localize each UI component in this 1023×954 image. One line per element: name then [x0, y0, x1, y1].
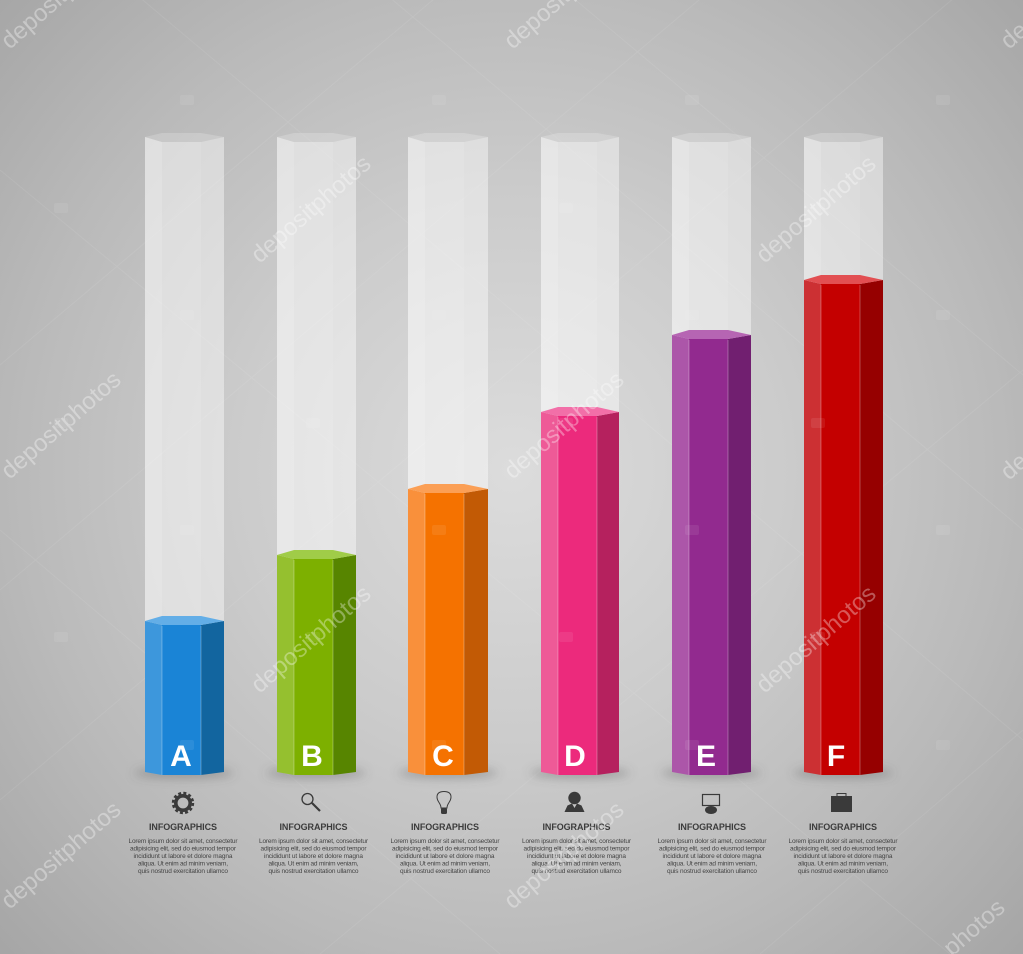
bar E	[672, 133, 751, 775]
text block E: quis nostrud exercitation ullamco	[667, 868, 757, 875]
letter A: A	[170, 740, 192, 773]
fill D	[541, 407, 619, 775]
text block F: adipisicing elit, sed do eiusmod tempor	[790, 846, 897, 852]
text block F: Lorem ipsum dolor sit amet, consectetur	[788, 838, 898, 845]
glass tube B	[277, 133, 356, 559]
icon: person	[564, 792, 584, 812]
text block A: Lorem ipsum dolor sit amet, consectetur	[128, 838, 238, 845]
shadow: bars	[134, 768, 893, 778]
text block D: adipisicing elit, sed do eiusmod tempor	[524, 846, 630, 852]
fill A	[145, 616, 224, 775]
watermarks: depositphotos	[246, 580, 376, 699]
text block C: quis nostrud exercitation ullamco	[400, 868, 490, 875]
watermarks: depositphotos	[246, 150, 376, 269]
heading D: INFOGRAPHICS	[542, 822, 610, 832]
heading E: INFOGRAPHICS	[678, 822, 746, 832]
text block F: aliqua. Ut enim ad minim veniam,	[798, 860, 888, 868]
watermarks: depositphotos	[751, 580, 881, 699]
glass tube D	[541, 133, 619, 416]
fill C	[408, 484, 488, 775]
bar C	[408, 133, 488, 775]
icon: gear	[173, 793, 193, 813]
glass tube E	[672, 133, 751, 339]
text block B: aliqua. Ut enim ad minim veniam,	[268, 860, 359, 868]
watermark camera marks	[54, 95, 950, 750]
letter C: C	[432, 740, 454, 773]
column B caption	[259, 794, 369, 875]
text block C: incididunt ut labore et dolore magna	[396, 853, 495, 860]
fill F	[804, 275, 883, 775]
text block F: incididunt ut labore et dolore magna	[794, 853, 893, 860]
glass tube F	[804, 133, 883, 284]
fill B	[277, 550, 356, 775]
text block A: quis nostrud exercitation ullamco	[138, 868, 228, 875]
column F caption	[788, 794, 898, 875]
text block E	[658, 838, 767, 875]
text block A: aliqua. Ut enim ad minim veniam,	[138, 860, 228, 868]
text block D: quis nostrud exercitation ullamco	[532, 868, 622, 875]
text block C: Lorem ipsum dolor sit amet, consectetur	[390, 838, 500, 845]
text block E: aliqua. Ut enim ad minim veniam,	[667, 860, 757, 868]
watermarks: depositphotos	[499, 366, 629, 485]
bar F	[804, 133, 883, 775]
heading B: INFOGRAPHICS	[280, 822, 348, 832]
heading F: INFOGRAPHICS	[809, 822, 877, 832]
letter E: E	[696, 740, 716, 773]
text block F: quis nostrud exercitation ullamco	[798, 868, 888, 875]
text block B: quis nostrud exercitation ullamco	[268, 868, 359, 875]
watermarks: depositphotos	[751, 150, 881, 269]
column D caption	[522, 792, 632, 875]
text block E: incididunt ut labore et dolore magna	[662, 853, 762, 860]
heading C: INFOGRAPHICS	[411, 822, 479, 832]
column C caption	[390, 792, 500, 875]
text block E: Lorem ipsum dolor sit amet, consectetur	[658, 838, 767, 845]
glass tube A	[145, 133, 224, 625]
text block B: incididunt ut labore et dolore magna	[264, 853, 363, 860]
text block B: adipisicing elit, sed do eiusmod tempor	[260, 846, 367, 852]
watermarks: depositphotos	[499, 796, 629, 915]
letter F: F	[827, 740, 845, 773]
glass tube C	[408, 133, 488, 493]
fill E	[672, 330, 751, 775]
text block C: adipisicing elit, sed do eiusmod tempor	[392, 846, 499, 852]
text block C	[390, 838, 500, 875]
text block D: Lorem ipsum dolor sit amet, consectetur	[522, 838, 632, 845]
column A caption	[128, 793, 238, 875]
text block D: incididunt ut labore et dolore magna	[527, 853, 626, 860]
bar B	[277, 133, 356, 775]
text block A	[128, 838, 238, 875]
icon: light bulb	[437, 792, 451, 814]
text block B	[259, 838, 369, 875]
bar D	[541, 133, 619, 775]
letter D: D	[564, 740, 586, 773]
heading A: INFOGRAPHICS	[149, 822, 217, 832]
icon: magnifier	[302, 794, 320, 811]
text block A: adipisicing elit, sed do eiusmod tempor	[130, 846, 237, 852]
text block F	[788, 838, 898, 875]
bar A	[145, 133, 224, 775]
text block D: aliqua. Ut enim ad minim veniam,	[532, 860, 622, 868]
text block E: adipisicing elit, sed do eiusmod tempor	[659, 846, 766, 852]
text block B: Lorem ipsum dolor sit amet, consectetur	[259, 838, 369, 845]
icon: computer	[702, 794, 720, 814]
column E caption	[658, 794, 767, 875]
text block C: aliqua. Ut enim ad minim veniam,	[400, 860, 490, 868]
letter B: B	[301, 740, 323, 773]
text block A: incididunt ut labore et dolore magna	[134, 853, 233, 860]
icon: briefcase	[831, 794, 852, 812]
text block D	[522, 838, 632, 875]
